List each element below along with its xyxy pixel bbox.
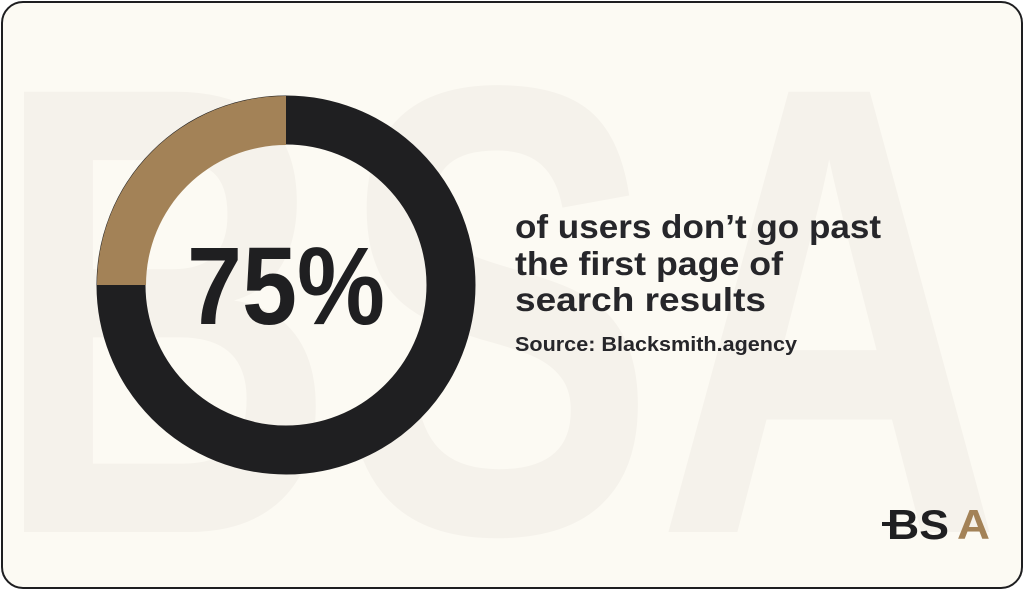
logo BSA xyxy=(882,501,990,548)
statement text: of users don’t go past xyxy=(515,208,881,245)
logo BSA: A xyxy=(957,501,990,548)
statement text xyxy=(515,208,881,318)
statement text: search results xyxy=(515,281,766,318)
logo BSA: BS xyxy=(887,501,949,548)
big percentage: 75% xyxy=(187,225,385,348)
source: Source: Blacksmith.agency xyxy=(515,334,798,356)
donut chart xyxy=(97,96,451,450)
statement text: the first page of xyxy=(515,245,784,282)
